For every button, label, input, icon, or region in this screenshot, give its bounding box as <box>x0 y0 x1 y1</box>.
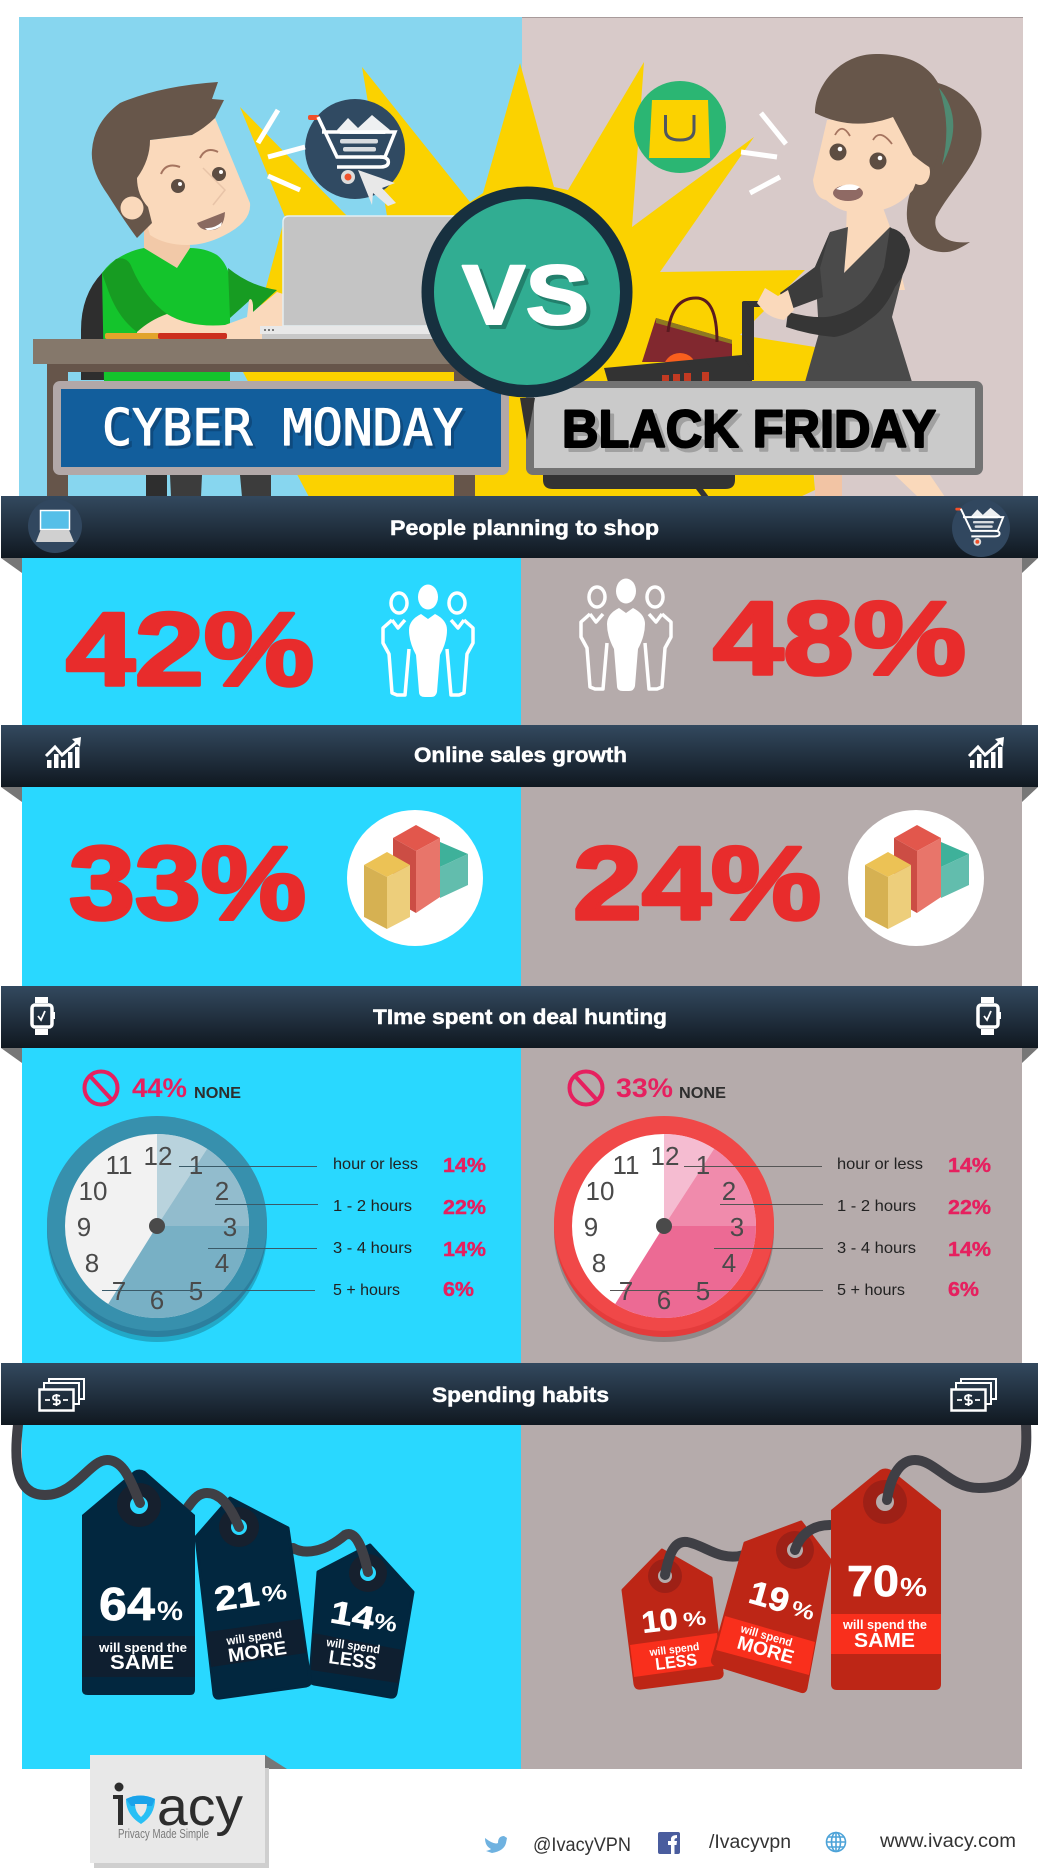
hero panel: Cyber Monday versus Black Friday illustration <box>19 17 1023 497</box>
clock <box>554 1116 823 1342</box>
panel: time spent, Black Friday <box>521 1048 1022 1363</box>
attention dashes right <box>741 113 786 193</box>
banner: people planning to shop <box>1 496 1038 558</box>
tag: will spend the same 64%: will spend the <box>98 1640 187 1655</box>
logo card: acy <box>157 1777 243 1837</box>
heading: TIme spent on deal hunting <box>373 1006 667 1029</box>
legend: 22% <box>443 1197 486 1219</box>
footer: social links <box>485 1831 1016 1856</box>
legend: hour or less <box>333 1156 418 1173</box>
clock: 5 <box>696 1276 710 1306</box>
tag: will spend less 14%: will spend <box>325 1635 381 1656</box>
clock: 8 <box>85 1248 99 1278</box>
panel: spending habits, Black Friday <box>521 1425 1026 1769</box>
icon: twitter <box>485 1836 507 1853</box>
legend: 6% <box>948 1279 979 1301</box>
tag: will spend the same 64%: % <box>157 1596 183 1626</box>
boy character <box>81 82 283 497</box>
clock: 6 <box>150 1285 164 1315</box>
tag: will spend more 19% <box>712 1522 830 1692</box>
banner folds <box>1 558 1038 1063</box>
tag: will spend the same 64%: 64 <box>99 1578 155 1630</box>
icon: watch left <box>32 997 55 1035</box>
clock: 3 <box>223 1212 237 1242</box>
logo card: Privacy Made Simple <box>118 1826 209 1841</box>
clock: 9 <box>584 1212 598 1242</box>
clock: 1 <box>696 1150 710 1180</box>
logo card <box>90 1755 287 1868</box>
twitter handle: @IvacyVPN <box>533 1835 631 1856</box>
tag: will spend more 19%: 19 <box>745 1573 794 1620</box>
tag: will spend the same 64% <box>82 1470 195 1695</box>
tag: will spend more 19%: % <box>789 1597 817 1625</box>
tag: will spend more 21%: will spend <box>225 1626 283 1648</box>
panel: online sales growth, Black Friday <box>521 787 1022 986</box>
icon: laptop <box>28 499 82 553</box>
panel: spending habits, Cyber Monday <box>16 1425 521 1769</box>
heading: Online sales growth <box>414 744 627 767</box>
sign: Black Friday <box>526 381 983 475</box>
icon: watch right <box>978 997 1001 1035</box>
tag: will spend less 14%: 14 <box>328 1593 378 1637</box>
rope to less tag <box>293 1534 368 1572</box>
icon: isometric bars <box>848 810 984 946</box>
clock <box>47 1116 318 1342</box>
none stat: NONE <box>194 1085 241 1102</box>
clock: 2 <box>722 1176 736 1206</box>
VS badge: VS <box>466 252 593 346</box>
none stat <box>570 1072 726 1104</box>
tag: will spend the same 70%: SAME <box>854 1630 915 1652</box>
icon: money left <box>40 1379 84 1410</box>
legend: 6% <box>443 1279 474 1301</box>
clock: 11 <box>612 1150 640 1180</box>
tag: will spend the same 70%: 70 <box>847 1557 899 1606</box>
legend: hour or less <box>837 1156 923 1173</box>
icon: facebook <box>658 1832 680 1854</box>
panel: people planning to shop, Cyber Monday <box>22 558 521 725</box>
VS badge: VS <box>462 248 589 342</box>
none stat: NONE <box>679 1085 726 1102</box>
rope from banner to same tag <box>16 1425 140 1503</box>
clock: 5 <box>189 1276 203 1306</box>
stat: 33%: 33% <box>69 826 306 942</box>
tag: will spend the same 64%: SAME <box>110 1652 174 1674</box>
clock: 7 <box>112 1276 126 1306</box>
sign: Cyber Monday <box>53 381 509 475</box>
none stat <box>84 1072 241 1104</box>
tag: will spend less 14% <box>310 1545 413 1697</box>
legend: 22% <box>948 1197 991 1219</box>
none stat: 44% <box>132 1073 187 1103</box>
tag: will spend more 21%: 21 <box>212 1575 262 1619</box>
clock: 4 <box>215 1248 229 1278</box>
sign: Black Friday: BLACK FRIDAY <box>562 400 936 459</box>
rope to less tag <box>665 1542 744 1575</box>
icon: group of people <box>383 584 473 697</box>
heading: People planning to shop <box>390 517 659 540</box>
facebook handle: /Ivacyvpn <box>709 1832 791 1853</box>
clock: 12 <box>144 1141 172 1171</box>
legend: 14% <box>948 1239 991 1261</box>
clock: 10 <box>586 1176 614 1206</box>
tag: will spend less 10%: will spend <box>648 1641 700 1659</box>
banner: spending habits <box>1 1363 1038 1425</box>
tag: will spend less 14%: % <box>372 1608 399 1637</box>
clock: 1 <box>189 1150 203 1180</box>
legend: 5 + hours <box>837 1282 905 1299</box>
rope to more tag <box>188 1493 239 1527</box>
laptop <box>260 216 480 339</box>
legend: 3 - 4 hours <box>333 1240 412 1257</box>
heading: Spending habits <box>432 1384 609 1407</box>
legend: 5 + hours <box>333 1282 400 1299</box>
shopping cart with bag <box>543 298 766 497</box>
stat: 24%: 24% <box>573 826 821 942</box>
banner: online sales growth <box>1 725 1038 787</box>
clock: 12 <box>651 1141 679 1171</box>
tag: will spend more 21% <box>196 1498 310 1698</box>
icon: shopping cart with cursor <box>305 99 405 206</box>
website: www.ivacy.com <box>879 1831 1016 1852</box>
legend: 1 - 2 hours <box>333 1198 412 1215</box>
icon: growth chart right <box>969 737 1004 768</box>
icon: group of people <box>581 578 671 691</box>
sign: Cyber Monday: CYBER MONDAY <box>105 402 466 460</box>
stat: 48%: 48% <box>713 581 966 697</box>
tag: will spend less 10%: 10 <box>640 1603 680 1640</box>
legend <box>333 1155 486 1301</box>
sign: Black Friday: BLACK FRIDAY <box>566 404 940 463</box>
stat: 42%: 42% <box>66 592 314 708</box>
panel: online sales growth, Cyber Monday <box>22 787 521 986</box>
legend: 3 - 4 hours <box>837 1240 916 1257</box>
clock: 6 <box>657 1285 671 1315</box>
tag: will spend less 14%: LESS <box>327 1647 378 1675</box>
attention dashes left <box>258 110 305 190</box>
panel: people planning to shop, Black Friday <box>521 558 1022 725</box>
clock: 8 <box>592 1248 606 1278</box>
legend: 14% <box>948 1155 991 1177</box>
clock: 3 <box>730 1212 744 1242</box>
sign: Cyber Monday: CYBER MONDAY <box>102 399 463 457</box>
tag: will spend less 10% <box>623 1550 722 1688</box>
clock: 4 <box>722 1248 736 1278</box>
clock: 9 <box>77 1212 91 1242</box>
tag: will spend less 10%: LESS <box>654 1650 698 1674</box>
icon: cart <box>952 499 1010 557</box>
none stat: 33% <box>616 1073 673 1103</box>
rope from banner to same tag <box>887 1425 1026 1500</box>
tag: will spend the same 70% <box>831 1468 941 1690</box>
yellow burst <box>240 62 815 497</box>
clock: 10 <box>79 1176 107 1206</box>
tag: will spend more 19%: MORE <box>735 1633 796 1669</box>
icon: isometric bars <box>347 810 483 946</box>
tag: will spend less 10%: % <box>682 1607 708 1632</box>
tag: will spend the same 70%: will spend the <box>842 1617 927 1632</box>
tag: will spend the same 70%: % <box>900 1572 927 1602</box>
woman character <box>757 54 982 497</box>
icon: growth chart left <box>46 737 81 768</box>
clock: 2 <box>215 1176 229 1206</box>
legend: 14% <box>443 1239 486 1261</box>
banner: time spent on deal hunting <box>1 986 1038 1048</box>
icon: globe <box>826 1832 846 1852</box>
rope to more tag <box>795 1525 830 1550</box>
icon: shopping bag <box>634 81 726 173</box>
desk <box>33 339 475 497</box>
clock: 7 <box>619 1276 633 1306</box>
icon: money right <box>952 1379 996 1410</box>
legend: 1 - 2 hours <box>837 1198 916 1215</box>
tag: will spend more 19%: will spend <box>738 1623 793 1649</box>
legend <box>837 1155 991 1301</box>
tag: will spend more 21%: % <box>260 1579 288 1607</box>
legend: 14% <box>443 1155 486 1177</box>
panel: time spent, Cyber Monday <box>22 1048 521 1363</box>
VS badge <box>422 186 632 440</box>
tag: will spend more 21%: MORE <box>227 1638 288 1667</box>
clock: 11 <box>106 1150 132 1180</box>
